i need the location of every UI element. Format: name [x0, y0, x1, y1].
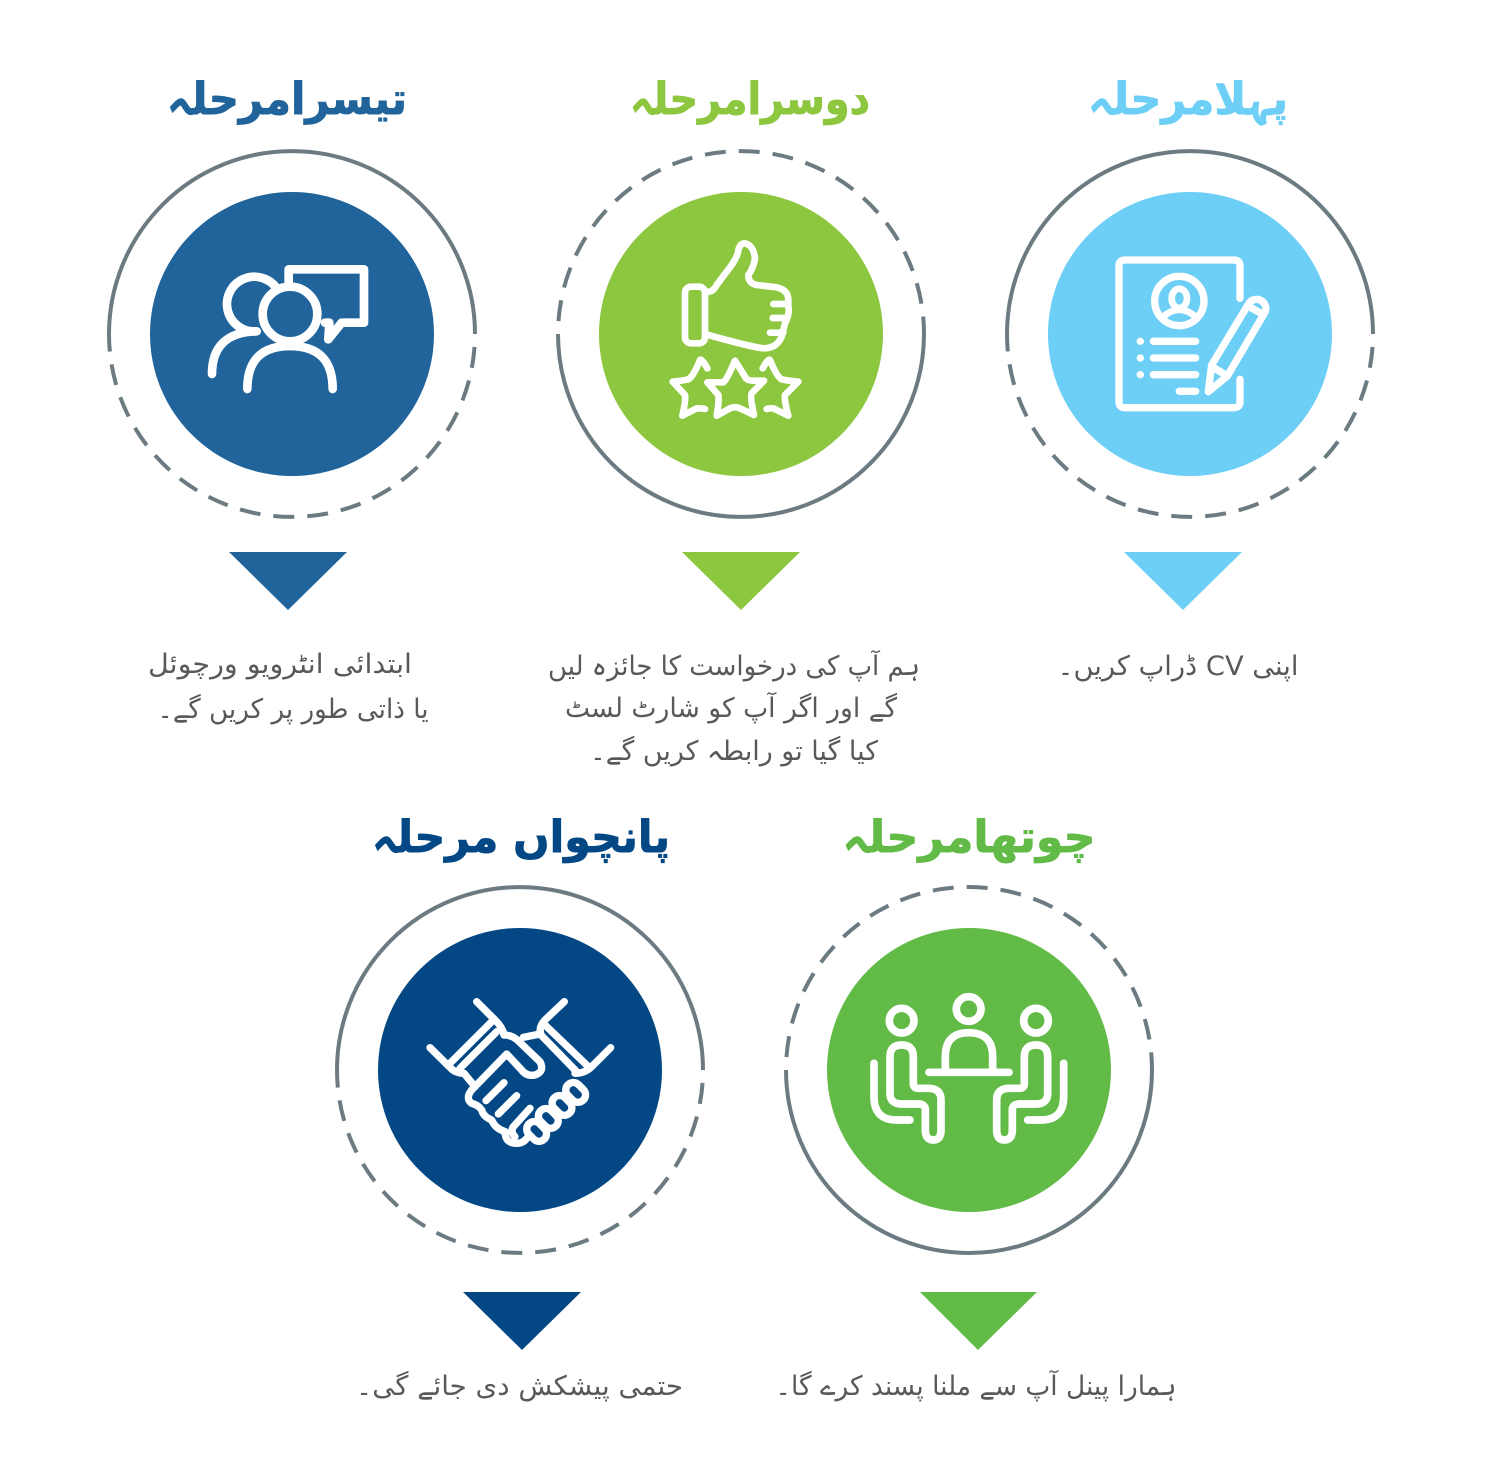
text: step 5: حتمی پیشکش دی جائے گی۔	[356, 1370, 683, 1402]
icon: CV document and pencil	[1119, 260, 1266, 408]
circle: step 1	[1048, 192, 1332, 476]
text: step 2: کیا گیا تو رابطہ کریں گے۔	[590, 735, 878, 767]
heading: step 4: چوتھامرحلہ	[842, 812, 1096, 863]
text: step 3: یا ذاتی طور پر کریں گے۔	[158, 693, 428, 725]
icon: handshake	[430, 1002, 611, 1144]
text: step 4: ہمارا پینل آپ سے ملنا پسند کرے گا۔	[776, 1370, 1176, 1402]
text: step 1: اپنی CV ڈراپ کریں۔	[1058, 651, 1298, 682]
arrow: step 2	[682, 552, 800, 610]
arrow: step 5	[463, 1292, 581, 1350]
heading: step 1: پہلامرحلہ	[1088, 74, 1288, 126]
circle: step 4	[827, 928, 1111, 1212]
text: step 2: ہم آپ کی درخواست کا جائزہ لیں	[548, 650, 920, 682]
ring: step 3	[109, 151, 475, 517]
text: step 3	[148, 649, 428, 725]
text: step 2: گے اور اگر آپ کو شارٹ لسٹ	[565, 692, 897, 724]
arrow: step 4	[920, 1292, 1037, 1350]
circle: step 5	[378, 928, 662, 1212]
heading: step 5: پانچواں مرحلہ	[372, 812, 670, 863]
step 1 panel	[1007, 74, 1373, 682]
heading: step 2: دوسرامرحلہ	[630, 74, 870, 125]
arrow: step 1	[1124, 552, 1242, 610]
circle: step 3	[150, 192, 434, 476]
step 5 panel	[337, 812, 703, 1402]
step 3 panel	[109, 74, 475, 725]
ring: step 2	[558, 151, 924, 517]
ring: step 5	[337, 887, 703, 1253]
heading: step 3: تیسرامرحلہ	[167, 74, 407, 125]
text: step 2	[548, 650, 920, 767]
step 2 panel	[548, 74, 924, 767]
step 4 panel	[776, 812, 1176, 1402]
text: step 3: ابتدائی انٹرویو ورچوئل	[148, 649, 412, 680]
circle: step 2	[599, 192, 883, 476]
icon: thumbs up and stars	[673, 243, 798, 416]
arrow: step 3	[229, 552, 347, 610]
icon: meeting table	[874, 997, 1064, 1140]
ring: step 4	[786, 887, 1152, 1253]
ring: step 1	[1007, 151, 1373, 517]
icon: people and speech bubble	[212, 269, 364, 389]
